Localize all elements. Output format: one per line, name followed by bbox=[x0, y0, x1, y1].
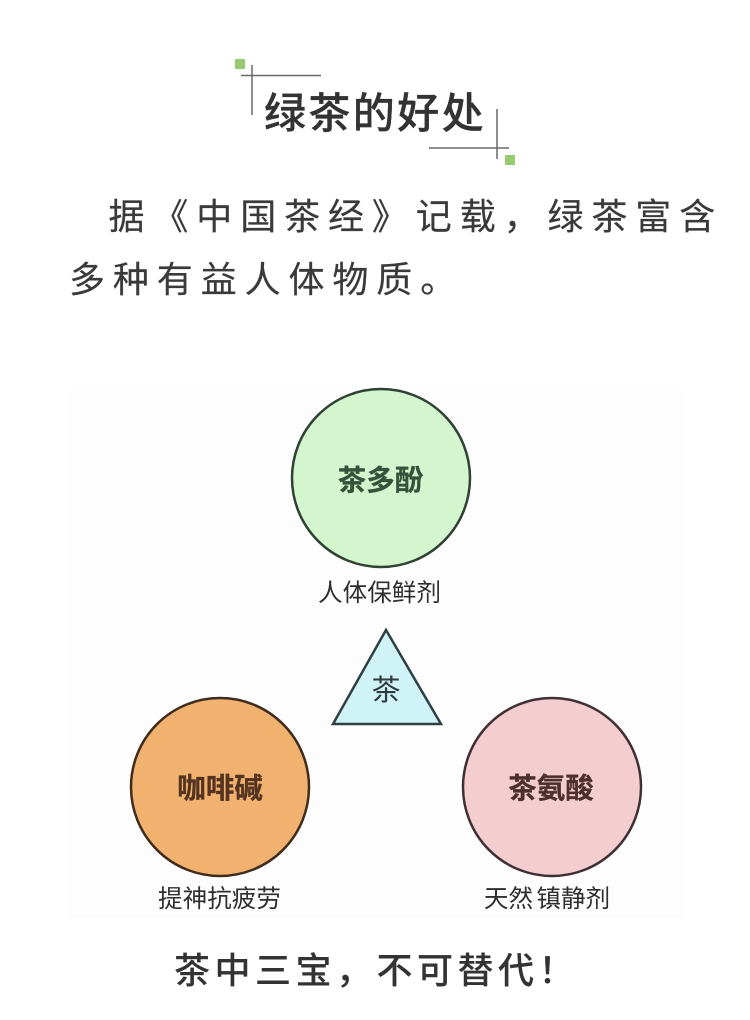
circle label: 茶多酚 bbox=[338, 465, 424, 497]
circle label: 咖啡碱 bbox=[177, 773, 263, 805]
heading: title with corner brackets bbox=[235, 59, 515, 165]
text block: closing slogan: 茶中三宝，不可替代！ bbox=[174, 950, 579, 991]
triangle label: 茶 bbox=[371, 674, 401, 707]
caption: 人体保鲜剂 bbox=[318, 579, 441, 607]
circle bbox=[463, 698, 641, 876]
bottom-right crossed bracket bbox=[429, 109, 509, 159]
intro line 1: 据《中国茶经》记载，绿茶富含 bbox=[108, 196, 723, 237]
circle label: 茶氨酸 bbox=[508, 773, 594, 805]
chart: top circle, tea polyphenols bbox=[292, 389, 470, 607]
icon: top-left green square bbox=[235, 59, 245, 69]
caption: 天然 镇静剂 bbox=[484, 885, 610, 913]
panel: diagram background bbox=[68, 390, 684, 918]
chart: left circle, caffeine bbox=[131, 698, 309, 913]
intro line 2: 多种有益人体物质。 bbox=[69, 259, 464, 300]
triangle bbox=[333, 630, 441, 724]
text block: introduction bbox=[69, 196, 723, 300]
title text: 绿茶的好处 bbox=[264, 90, 486, 137]
top-left crossed bracket bbox=[241, 65, 321, 115]
chart: right circle, theanine bbox=[463, 698, 641, 913]
icon: bottom-right green square bbox=[505, 155, 515, 165]
icon: center triangle, tea bbox=[333, 630, 441, 724]
caption: 提神抗疲劳 bbox=[158, 885, 281, 913]
circle bbox=[131, 698, 309, 876]
circle bbox=[292, 389, 470, 567]
